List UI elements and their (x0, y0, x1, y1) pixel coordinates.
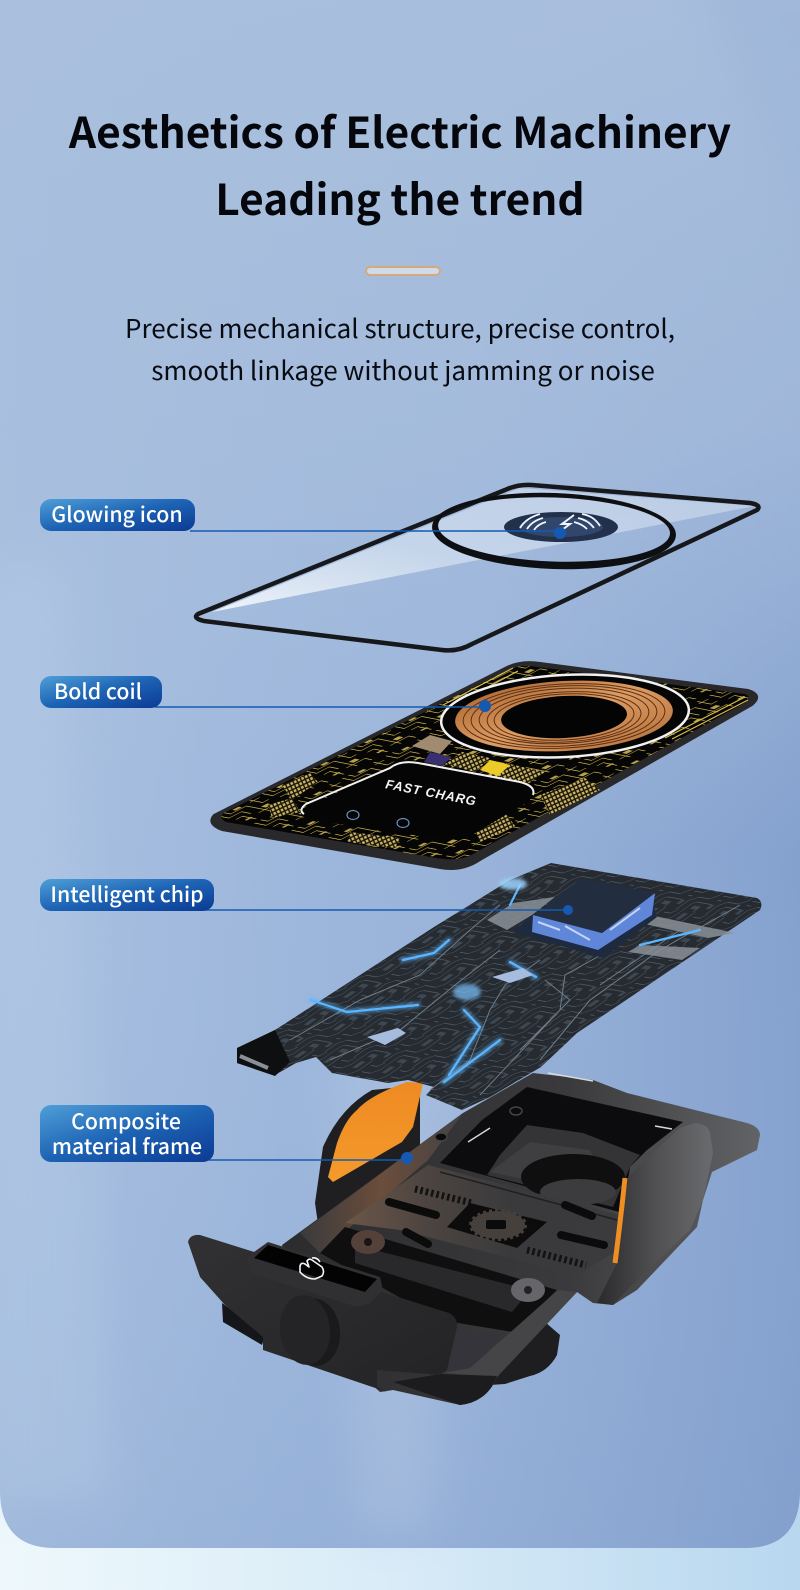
pillar screws (435, 1107, 522, 1141)
callout: composite material frame: material frame (52, 1130, 202, 1161)
callout: bold coil: Bold coil (54, 675, 142, 706)
right grip (597, 1123, 713, 1305)
callout: glowing icon: Glowing icon (51, 498, 183, 529)
icon: touch hand (300, 1258, 324, 1279)
lower right floor and rim (393, 1290, 577, 1405)
title (68, 100, 731, 228)
compartment floor (487, 1125, 640, 1207)
layer: coil board (211, 662, 757, 869)
screen icons (347, 810, 409, 828)
touch button (247, 1242, 383, 1307)
orange stripe (615, 1178, 625, 1263)
subtitle (125, 309, 675, 388)
chip (513, 878, 657, 958)
rack plate (345, 1165, 620, 1275)
title: Leading the trend (215, 167, 585, 228)
title: Aesthetics of Electric Machinery (68, 100, 731, 161)
screws (351, 1230, 545, 1302)
callout: bold coil (40, 675, 491, 712)
rear clip (222, 1303, 265, 1345)
rack teeth (415, 1189, 586, 1265)
cup recess (521, 1154, 625, 1205)
round mount (490, 1322, 560, 1385)
callout: glowing icon (40, 498, 566, 539)
screen text: FAST CHARG (384, 776, 478, 809)
gold printed circuit (221, 666, 749, 859)
usb connector (237, 1030, 290, 1076)
block under plate (355, 1245, 530, 1312)
layer: chip board (237, 863, 761, 1110)
board cut-outs (367, 968, 533, 1045)
glass frame (196, 485, 758, 650)
decorative copper pill (366, 267, 440, 275)
left rim (300, 1113, 463, 1253)
ring on glass (431, 489, 677, 573)
long traces (290, 905, 740, 1095)
screen outline (301, 762, 533, 814)
icon: wireless charging glow (504, 512, 618, 542)
orange wing (328, 1082, 423, 1182)
fast-charge screen (301, 762, 532, 840)
lower dark channel (320, 1227, 557, 1332)
front panel (188, 1235, 457, 1392)
callout: intelligent chip (40, 878, 573, 915)
solder clusters (268, 668, 748, 848)
glass reflection (212, 488, 755, 612)
tray shell (282, 1073, 760, 1405)
circuit board (237, 863, 761, 1110)
back rim glints (468, 1073, 672, 1142)
gear cut-out (447, 1203, 547, 1248)
white ring (439, 669, 691, 763)
lit traces (311, 878, 700, 1082)
layer: glass cover (196, 485, 758, 650)
knob (276, 1293, 343, 1369)
plate step line (440, 1172, 617, 1220)
plate slots (389, 1202, 604, 1245)
callout: composite material frame: Composite (71, 1105, 181, 1136)
subtitle: smooth linkage without jamming or noise (151, 351, 655, 388)
left wing back (315, 1085, 420, 1224)
callout: composite material frame (40, 1105, 413, 1164)
rear compartment (440, 1087, 683, 1213)
grey trace bands near chip (487, 897, 735, 960)
layer: composite holder (188, 1073, 760, 1405)
board body (211, 662, 757, 869)
callout: intelligent chip: Intelligent chip (50, 878, 204, 909)
copper coil (453, 675, 675, 757)
subtitle: Precise mechanical structure, precise control, (125, 309, 675, 346)
